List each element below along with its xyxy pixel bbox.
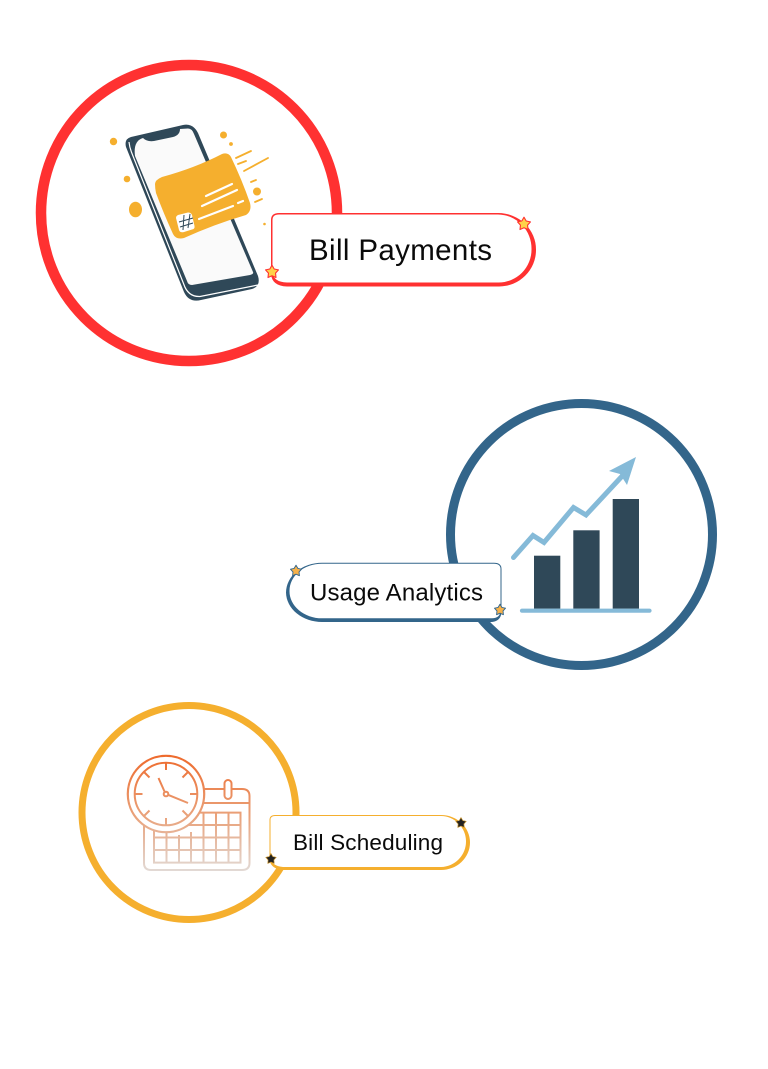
label: usage analytics [286,563,506,622]
label text: Usage Analytics [310,580,483,606]
label text: Bill Payments [309,234,492,267]
trend line [514,473,625,558]
phone screen [135,128,253,285]
clock ticks [135,763,198,825]
panel: usage analytics [286,404,712,666]
label shape [271,213,536,286]
panel: bill scheduling [82,706,470,920]
label interior [289,564,500,618]
label shape [286,563,502,622]
card text lines [199,184,243,219]
label: bill scheduling [266,815,470,870]
calendar header line [198,802,250,804]
calendar body [144,789,250,870]
label shape [270,815,470,870]
calendar ring [224,780,232,799]
amber circle ring [82,706,296,920]
clock pivot [164,792,168,796]
phone body [126,125,259,301]
arrow head [609,457,636,485]
red circle ring [41,65,337,361]
clock outer rim [128,756,204,832]
bars [534,499,639,609]
motion dots and streaks [110,132,268,225]
star [518,217,530,230]
calendar grid [154,813,240,863]
star [456,818,466,827]
panel: bill payments [41,65,536,361]
clock hands [158,778,188,803]
label interior [272,214,532,283]
star [290,565,302,576]
phone side highlight [129,142,258,297]
star [266,854,276,863]
baseline [522,609,650,613]
label text: Bill Scheduling [293,830,443,855]
icon: rising bar chart [514,457,650,611]
icon: clock and calendar [128,756,250,870]
clock inner face [135,763,197,825]
payment card [155,153,250,238]
star [494,604,506,615]
card chip [176,212,195,232]
label: bill payments [266,213,536,286]
label interior [270,816,466,867]
blue circle ring [450,404,712,666]
star [266,265,278,278]
icon: phone with payment card [110,125,268,301]
